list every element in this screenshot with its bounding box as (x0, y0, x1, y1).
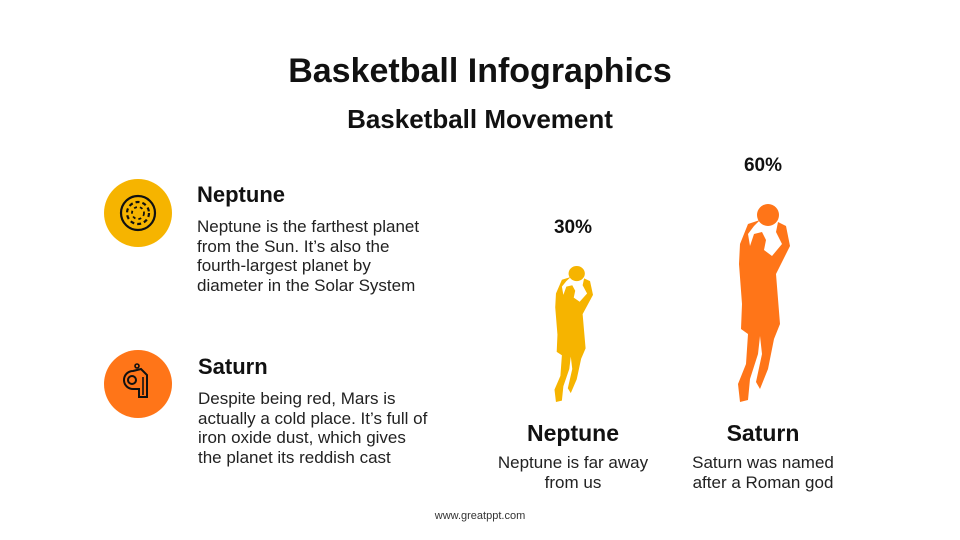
text: neptune (197, 217, 419, 294)
footer: www.greatppt.com (435, 510, 525, 522)
text: neptune (chart): from us (545, 472, 601, 492)
icon: neptune pattern (104, 179, 172, 247)
text: neptune: from the Sun. It’s also the (197, 236, 389, 256)
text: saturn (chart): Saturn was named (692, 453, 834, 472)
label: 60%: 60% (744, 155, 782, 176)
text: saturn: Despite being red, Mars is (198, 389, 395, 408)
text: neptune: fourth-largest planet by (197, 256, 371, 275)
silhouette: small player (554, 266, 593, 402)
title: Basketball Infographics (288, 52, 672, 90)
text: saturn: iron oxide dust, which gives (198, 428, 406, 447)
label: 30%: 30% (554, 217, 592, 238)
text: neptune (chart) (498, 453, 648, 492)
text: saturn (chart) (692, 453, 834, 492)
silhouette: large player (738, 204, 790, 402)
text: saturn (198, 389, 428, 466)
subtitle: Basketball Movement (347, 104, 613, 134)
text: neptune (chart): Neptune is far away (498, 453, 648, 472)
text: neptune: diameter in the Solar System (197, 276, 415, 294)
text: saturn: actually a cold place. It’s full of (198, 408, 427, 428)
icon: whistle (104, 350, 172, 418)
text: saturn: the planet its reddish cast (198, 448, 391, 466)
heading: neptune (chart): Neptune (527, 420, 619, 446)
heading: saturn: Saturn (198, 354, 268, 379)
heading: neptune: Neptune (197, 182, 285, 207)
heading: saturn (chart): Saturn (727, 420, 799, 446)
text: neptune: Neptune is the farthest planet (197, 217, 419, 236)
text: saturn (chart): after a Roman god (693, 472, 833, 492)
